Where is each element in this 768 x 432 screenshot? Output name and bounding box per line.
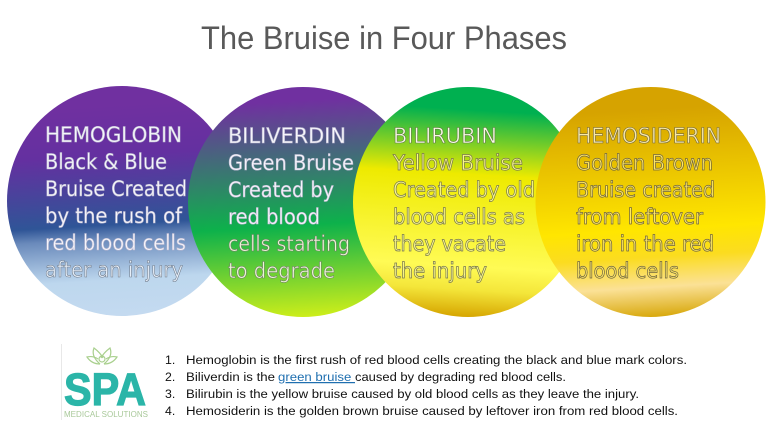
panel: hemoglobin circle: by the rush of [45,204,183,228]
panel: hemosiderin circle: blood cells [576,259,679,283]
panel: hemosiderin circle: iron in the red [576,232,714,256]
logo: SPA Medical Solutions: SPA [64,364,146,415]
panel: bilirubin circle [353,87,583,317]
panel: bilirubin circle: blood cells as [393,205,525,229]
panel: biliverdin circle: to degrade [228,259,335,283]
panel: bilirubin circle: BILIRUBIN [393,124,497,148]
icon: lotus [87,348,117,364]
panel: bilirubin circle: Yellow Bruise [392,151,523,175]
panel: hemoglobin circle [7,86,237,316]
panel: hemosiderin circle [536,87,766,317]
panel: hemosiderin circle: from leftover [576,205,703,229]
panel: biliverdin circle [188,87,418,317]
link: green bruise: green bruise [278,370,355,384]
panel: biliverdin circle: red blood [228,205,320,229]
numbered list: Hemosiderin is the golden brown bruise caused by leftover iron from red blood cells. [186,404,678,418]
numbered list: 3. [165,387,175,401]
panel: hemoglobin circle: HEMOGLOBIN [45,123,182,147]
numbered list: Biliverdin is the [186,370,275,384]
logo: SPA Medical Solutions: MEDICAL SOLUTIONS [64,410,148,419]
panel: hemoglobin circle: Black & Blue [45,150,167,174]
panel: bilirubin circle: the injury [393,259,487,283]
numbered list: Hemoglobin is the first rush of red blood cells creating the black and blue mark colors. [186,353,687,367]
panel: bilirubin circle: they vacate [393,232,506,256]
numbered list [165,353,687,418]
numbered list: 4. [165,404,175,418]
panel: hemoglobin circle: red blood cells [45,231,186,255]
numbered list: Bilirubin is the yellow bruise caused by old blood cells as they leave the injury. [186,387,639,401]
panel: hemosiderin circle: HEMOSIDERIN [576,124,721,148]
panel: hemoglobin circle: Bruise Created [45,177,187,201]
panel: hemoglobin circle: after an injury [45,258,183,282]
logo: SPA Medical Solutions [62,344,148,420]
panel: hemosiderin circle: Bruise created [576,178,715,202]
numbered list: 2. [165,370,175,384]
panel: bilirubin circle: Created by old [393,178,535,202]
panel: hemosiderin circle: Golden Brown [576,151,713,175]
panel: biliverdin circle: cells starting [228,232,350,256]
title: The Bruise in Four Phases [201,20,567,56]
numbered list: caused by degrading red blood cells. [355,370,566,384]
numbered list: 1. [165,353,175,367]
panel: biliverdin circle: BILIVERDIN [228,124,346,148]
panel: biliverdin circle: Created by [228,178,334,202]
panel: biliverdin circle: Green Bruise [228,151,354,175]
